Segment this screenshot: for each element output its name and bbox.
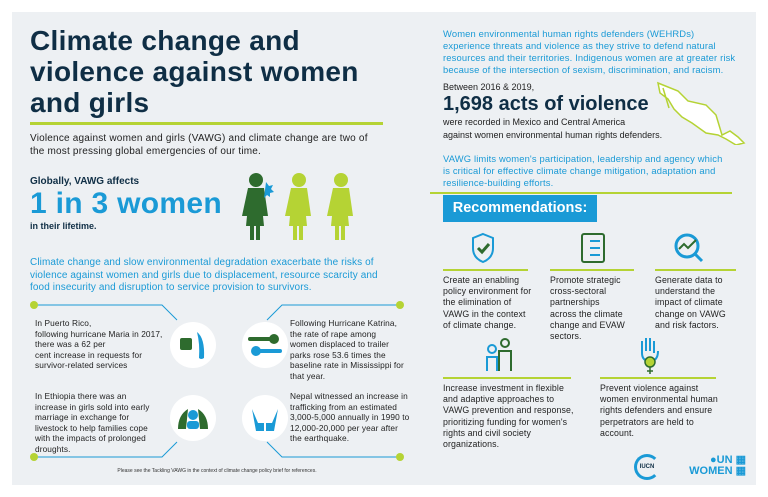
text: Ethiopia: increase in girls sold into early xyxy=(35,402,149,412)
blue paragraph xyxy=(30,257,378,293)
recommendation 5: Prevent violence against xyxy=(600,383,698,393)
statistic: 1,698 acts: 1,698 acts of violence xyxy=(443,93,649,115)
intro text: Violence against women and girls (VAWG) and climate change are two of xyxy=(30,133,368,144)
recommendation 4: VAWG prevention and response, xyxy=(443,405,574,415)
recommendation 3: and risk factors. xyxy=(655,320,719,330)
text: Katrina: the rate of rape among xyxy=(290,328,376,338)
recommendations heading: Recommendations: xyxy=(453,200,587,216)
blue paragraph: food insecurity and disruption to service provision to survivors. xyxy=(30,282,312,293)
recommendation 1: VAWG in the context xyxy=(443,309,526,319)
title: violence against women xyxy=(30,56,359,87)
text: Ethiopia: marriage in exchange for xyxy=(35,412,129,422)
recommendation 2: change and EVAW xyxy=(550,320,625,330)
text: Katrina xyxy=(290,318,404,380)
text: Katrina: baseline rate in Mississippi for xyxy=(290,360,404,370)
recommendation 4: organizations. xyxy=(443,439,499,449)
blue paragraph VAWG limits xyxy=(443,153,722,188)
text: Puerto Rico: In Puerto Rico, xyxy=(35,318,91,328)
recommendation 2: partnerships xyxy=(550,297,600,307)
icon: shield xyxy=(472,232,494,264)
recommendation 1 xyxy=(443,269,532,330)
icon: three women figures xyxy=(242,173,353,240)
recommendation 5 xyxy=(600,377,718,438)
icon: handcuffs xyxy=(242,322,288,368)
logo: IUCN xyxy=(634,454,660,480)
text: Ethiopia: livestock to help families cope xyxy=(35,422,148,432)
text: Katrina: Following Hurricane Katrina, xyxy=(290,318,397,328)
recommendation 3: Generate data to xyxy=(655,275,723,285)
icon: fist and hand xyxy=(170,322,216,368)
recommendation 5: account. xyxy=(600,428,634,438)
WEHRD text: Women environmental human rights defenders (WEHRDs) xyxy=(443,28,694,39)
recommendation 2 xyxy=(550,269,634,341)
recommendation 4: and adaptive approaches to xyxy=(443,394,554,404)
recommendation 4: prioritizing funding for women's xyxy=(443,417,567,427)
text: Nepal xyxy=(290,391,409,443)
WEHRD text: because of the intersection of sexism, discrimination, and racism. xyxy=(443,64,723,75)
text: Ethiopia xyxy=(35,391,150,454)
blue paragraph VAWG limits: VAWG limits women's participation, leadership and agency which xyxy=(443,153,722,164)
statistic: 1 in 3 women xyxy=(30,176,222,231)
text: Katrina: women displaced to trailer xyxy=(290,339,389,349)
recommendation 5: rights defenders and ensure xyxy=(600,405,712,415)
recommendation 1: Create an enabling xyxy=(443,275,519,285)
recommendations heading xyxy=(443,195,597,222)
blue paragraph VAWG limits: is critical for effective climate change mitigation, adaptation and xyxy=(443,165,716,176)
icon: magnifier chart xyxy=(674,234,703,262)
recommendation 5: perpetrators are held to xyxy=(600,417,694,427)
text: Nepal: trafficking from an estimated xyxy=(290,402,397,412)
text: Puerto Rico: there was a 62 per xyxy=(35,339,106,349)
recommendation 2: across the climate xyxy=(550,309,623,319)
statistic: 1 in 3 women: 1 in 3 women xyxy=(30,187,222,220)
intro text xyxy=(30,133,368,157)
statistic: 1,698 acts: Between 2016 & 2019, xyxy=(443,82,534,92)
recommendation 3 xyxy=(655,269,736,330)
connector lines xyxy=(30,301,404,461)
blue paragraph: violence against women and girls due to displacement, resource scarcity and xyxy=(30,270,378,280)
text: Nepal: Nepal witnessed an increase in xyxy=(290,391,408,401)
text: Nepal: the earthquake. xyxy=(290,433,349,443)
recommendation 2: sectors. xyxy=(550,331,582,341)
blue paragraph VAWG limits: resilience-building efforts. xyxy=(443,177,553,188)
icon: hand with female symbol xyxy=(641,338,659,374)
logo: UN Women xyxy=(689,454,746,477)
text: Ethiopia: In Ethiopia there was an xyxy=(35,391,126,401)
title: Climate change and xyxy=(30,25,300,56)
statistic: 1,698 acts: were recorded in Mexico and Central America xyxy=(443,117,625,127)
text: Nepal: 3,000-5,000 annually in 1990 to xyxy=(290,412,409,422)
text: Ethiopia: droughts. xyxy=(35,444,70,454)
icon: checklist xyxy=(581,233,605,263)
text: Nepal: 12,000-20,000 per year after xyxy=(290,422,398,432)
text: Puerto Rico: survivor-related services xyxy=(35,360,127,370)
recommendation 2: Promote strategic xyxy=(550,275,621,285)
recommendation 3: impact of climate xyxy=(655,297,723,307)
title xyxy=(30,25,359,118)
statistic: 1,698 acts xyxy=(443,82,662,140)
text: Ethiopia: with the impacts of prolonged xyxy=(35,433,146,443)
recommendation 1: policy environment for xyxy=(443,286,531,296)
intro text: the most pressing global emergencies of our time. xyxy=(30,146,261,157)
WEHRD text xyxy=(443,28,735,75)
statistic: 1,698 acts: against women environmental human rights defenders. xyxy=(443,130,662,140)
WEHRD text: experience threats and violence as they strive to defend natural xyxy=(443,40,716,51)
recommendation 4: Increase investment in flexible xyxy=(443,383,564,393)
recommendation 5: women environmental human xyxy=(600,394,718,404)
icon: hands xyxy=(242,395,288,441)
logo: UN Women: ●UN ▦ xyxy=(710,454,746,466)
text: Puerto Rico: cent increase in requests for xyxy=(35,350,142,360)
footnote: Please see the Tackling VAWG in the context of climate change policy brief for references. xyxy=(117,468,317,474)
recommendation 4: rights and civil society xyxy=(443,428,531,438)
recommendation 2: cross-sectoral xyxy=(550,286,606,296)
blue paragraph: Climate change and slow environmental degradation exacerbate the risks of xyxy=(30,257,374,268)
icon: family xyxy=(486,338,512,371)
recommendation 3: change on VAWG xyxy=(655,309,726,319)
icon: map of Mexico xyxy=(657,82,746,145)
recommendation 4 xyxy=(443,377,574,449)
statistic: 1 in 3 women: in their lifetime. xyxy=(30,221,97,231)
text: Katrina: parks rose 53.6 times the xyxy=(290,350,386,360)
title: and girls xyxy=(30,87,149,118)
logo: UN Women: WOMEN ▦ xyxy=(689,465,746,477)
recommendation 3: understand the xyxy=(655,286,715,296)
statistic: 1 in 3 women: Globally, VAWG affects xyxy=(30,176,139,187)
text: Katrina: that year. xyxy=(290,370,325,380)
logo: IUCN: IUCN xyxy=(640,464,654,470)
recommendation 1: the elimination of xyxy=(443,297,511,307)
icon: protected person xyxy=(170,395,216,441)
recommendation 1: of climate change. xyxy=(443,320,516,330)
WEHRD text: resources and their territories. Indigenous women are at greater risk xyxy=(443,52,735,63)
text: Puerto Rico: following hurricane Maria in 2017, xyxy=(35,328,162,338)
text: Puerto Rico xyxy=(35,318,162,370)
